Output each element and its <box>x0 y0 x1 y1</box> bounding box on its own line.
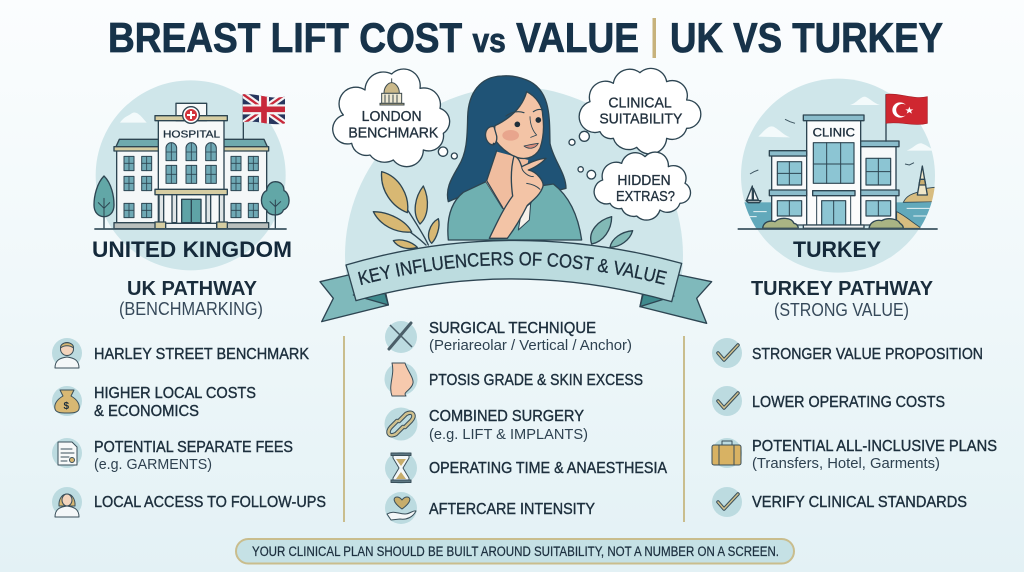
text: Harley Street: HARLEY STREET BENCHMARK <box>94 346 309 363</box>
text: combined surgery: (e.g. LIFT & IMPLANTS) <box>429 426 588 443</box>
heading: United Kingdom: UNITED KINGDOM <box>92 237 292 262</box>
icon: scalpel <box>385 321 417 353</box>
icon: left tree <box>94 176 114 228</box>
heading: UK pathway: UK PATHWAY <box>127 278 258 300</box>
callout: clinical suitability: SUITABILITY <box>599 110 682 127</box>
text: all-inclusive: POTENTIAL ALL-INCLUSIVE PLANS <box>752 438 997 455</box>
title <box>108 14 943 61</box>
text: combined surgery <box>429 408 588 443</box>
callout: footer note <box>236 539 794 564</box>
icon: check <box>712 487 742 517</box>
icon: check <box>712 386 742 416</box>
text: all-inclusive <box>752 438 997 472</box>
text: verify standards: VERIFY CLINICAL STANDARDS <box>752 494 967 511</box>
icon: female doctor <box>52 487 82 517</box>
heading: Turkey: TURKEY <box>793 237 881 262</box>
text: combined surgery: COMBINED SURGERY <box>429 408 584 425</box>
icon: Turkey flag <box>886 94 927 142</box>
icon: hourglass <box>385 452 417 484</box>
icon: money bag: $ <box>64 401 70 412</box>
text: ptosis: PTOSIS GRADE & SKIN EXCESS <box>429 372 643 389</box>
icon: UK hospital building <box>114 103 269 229</box>
text: surgical technique: (Periareolar / Vertical / Anchor) <box>429 337 632 354</box>
panel: Turkey illustration <box>733 79 940 273</box>
text: all-inclusive: (Transfers, Hotel, Garments) <box>752 455 940 472</box>
callout: London benchmark: BENCHMARK <box>348 124 438 141</box>
callout: London benchmark <box>333 69 457 167</box>
subheading: strong value: (STRONG VALUE) <box>774 300 909 320</box>
text: operating time: OPERATING TIME & ANAESTHESIA <box>429 460 667 477</box>
banner: key influencers <box>319 240 712 324</box>
icon: Turkey clinic building <box>769 115 899 228</box>
text: separate fees: POTENTIAL SEPARATE FEES <box>94 439 293 456</box>
text: separate fees: (e.g. GARMENTS) <box>94 456 212 473</box>
icon: money bag <box>52 386 82 416</box>
callout: London benchmark: LONDON <box>362 108 422 125</box>
text: value proposition: STRONGER VALUE PROPOSITION <box>752 346 983 363</box>
text: aftercare: AFTERCARE INTENSITY <box>429 501 595 518</box>
panel: UK list <box>52 338 326 517</box>
banner: key influencers: KEY INFLUENCERS OF COST & VALUE <box>358 252 668 286</box>
icon: document <box>52 438 82 468</box>
callout: clinical suitability <box>569 68 701 154</box>
icon: gold leaves <box>373 172 439 249</box>
panel: Turkey illustration: CLINIC <box>813 127 855 140</box>
icon: right tree <box>261 182 289 228</box>
text: higher local costs: & ECONOMICS <box>94 403 199 420</box>
panel: UK illustration <box>94 80 289 270</box>
panel: UK illustration: HOSPITAL <box>163 129 220 140</box>
icon: male doctor <box>52 338 82 368</box>
title: BREAST LIFT COST vs VALUE <box>108 14 639 61</box>
text: operating costs: LOWER OPERATING COSTS <box>752 394 945 411</box>
text: follow-ups: LOCAL ACCESS TO FOLLOW-UPS <box>94 494 326 511</box>
callout: hidden extras: HIDDEN <box>617 172 671 189</box>
callout: hidden extras <box>578 152 691 220</box>
icon: breast profile <box>384 362 418 396</box>
icon: UK flag <box>242 94 285 139</box>
text: higher local costs: HIGHER LOCAL COSTS <box>94 385 256 402</box>
icon: check <box>712 338 742 368</box>
icon: teal leaves <box>591 217 633 247</box>
icon: shrubs <box>763 218 903 228</box>
subheading: benchmarking: (BENCHMARKING) <box>119 299 263 319</box>
icon: thinking woman <box>447 76 582 240</box>
icon: heart in hand <box>385 492 417 524</box>
callout: clinical suitability: CLINICAL <box>608 95 672 112</box>
icon: lighthouse <box>917 166 927 195</box>
panel: centre illustration <box>319 68 712 324</box>
panel: Turkey list <box>712 338 997 517</box>
icon: chain link <box>384 408 418 440</box>
panel: centre list <box>384 320 667 524</box>
icon: sailboat <box>746 186 761 203</box>
text: surgical technique <box>429 320 632 354</box>
callout: hidden extras: EXTRAS? <box>616 188 675 205</box>
icon: domed building <box>380 78 404 105</box>
text: surgical technique: SURGICAL TECHNIQUE <box>429 320 596 337</box>
callout: footer note: YOUR CLINICAL PLAN SHOULD BE BUILT AROUND SUITABILITY, NOT A NUMBER ON A SCREEN. <box>252 544 779 559</box>
text: separate fees <box>94 439 293 473</box>
text: higher local costs <box>94 385 256 420</box>
icon: suitcase <box>712 438 742 468</box>
title: UK VS TURKEY <box>670 14 943 61</box>
heading: Turkey pathway: TURKEY PATHWAY <box>751 278 934 300</box>
icon: red cross <box>183 107 199 123</box>
